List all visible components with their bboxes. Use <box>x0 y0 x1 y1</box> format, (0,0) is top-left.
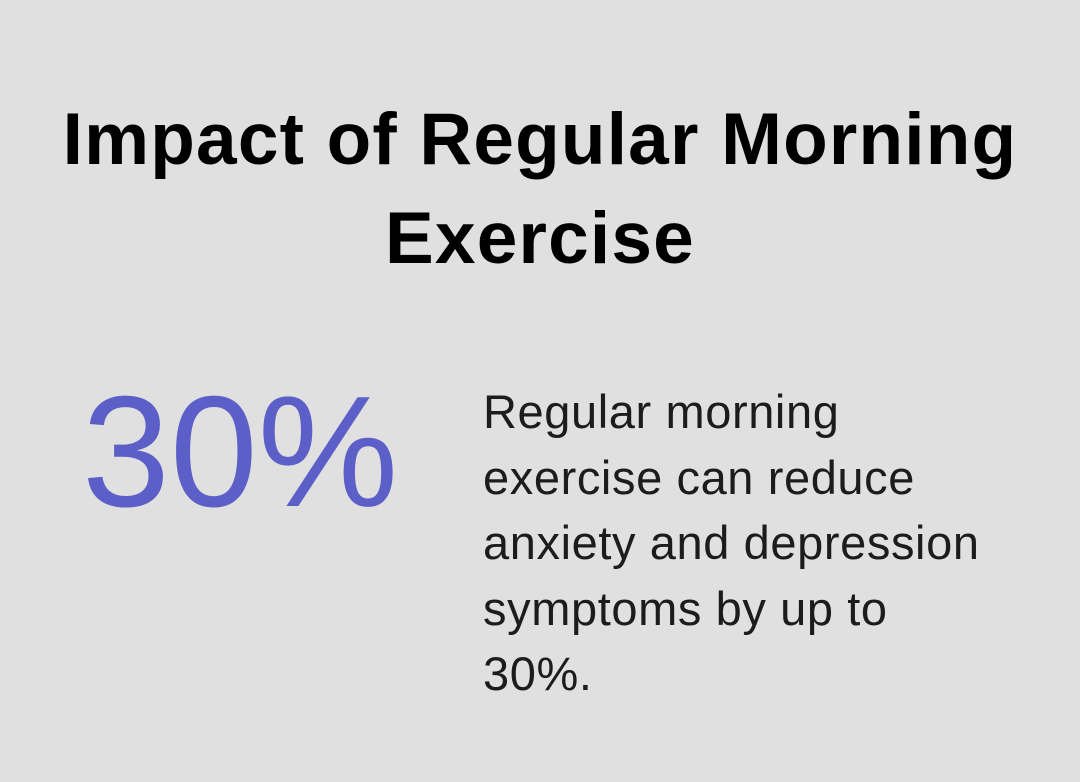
description text: Regular morning <box>483 385 839 438</box>
title <box>63 99 1017 279</box>
description text: symptoms by up to <box>483 582 888 634</box>
title: Exercise <box>385 198 695 279</box>
description text: anxiety and depression <box>483 516 980 569</box>
title: Impact of Regular Morning <box>63 99 1017 180</box>
description text: 30%. <box>483 647 593 700</box>
description text <box>483 385 980 700</box>
description text: exercise can reduce <box>483 450 915 504</box>
stat: 30%: 30% <box>82 364 398 540</box>
